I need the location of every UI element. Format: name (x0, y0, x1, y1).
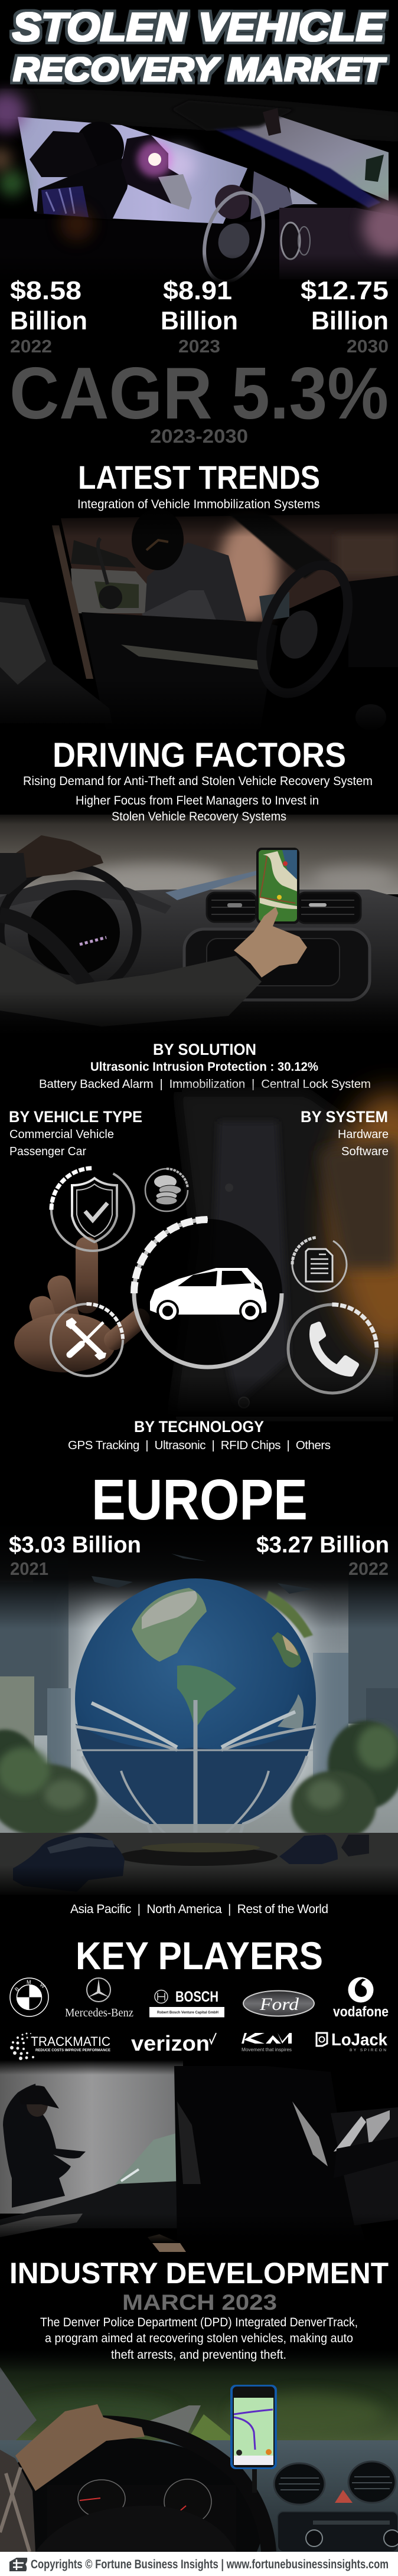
title: STOLEN VEHICLE (12, 5, 386, 50)
by system (301, 1108, 389, 1158)
photo: businessman in suit touching icons (0, 1092, 398, 1417)
market value 2030 (301, 276, 389, 357)
industry development text (40, 2316, 358, 2362)
logo: LoJack: LoJack (331, 2031, 388, 2049)
by solution: Ultrasonic Intrusion Protection : 30.12% (90, 1060, 318, 1074)
driving factors: Rising Demand for Anti-Theft and Stolen Vehicle Recovery System (23, 774, 373, 788)
logo: Vodafone (333, 1977, 389, 2020)
industry development heading: INDUSTRY DEVELOPMENT (9, 2257, 389, 2290)
market value 2022: $8.58 (10, 276, 81, 305)
photo: driver touching phone map on dashboard (0, 806, 398, 1039)
market value 2022 (10, 276, 87, 357)
logo: Ford (243, 1990, 314, 2016)
europe value 2022: 2022 (348, 1558, 389, 1579)
title: RECOVERY MARKET (13, 51, 387, 89)
logo: Kia: Movement that inspires (242, 2047, 292, 2052)
logo: Mercedes-Benz: Mercedes-Benz (65, 2006, 133, 2019)
industry development text: a program aimed at recovering stolen vehicles, making auto (45, 2332, 353, 2345)
logo: Verizon: verizon (131, 2031, 210, 2055)
industry development text: The Denver Police Department (DPD) Integrated DenverTrack, (40, 2316, 358, 2329)
latest trends: Integration of Vehicle Immobilization Systems (77, 498, 320, 511)
europe value 2021: $3.03 Billion (9, 1532, 141, 1558)
logo: Kia (242, 2033, 292, 2052)
market value 2023 (161, 276, 238, 357)
industry development heading: MARCH 2023 (122, 2290, 277, 2315)
market value 2023: $8.91 (163, 276, 232, 305)
by solution: BY SOLUTION (153, 1041, 256, 1058)
by solution (39, 1041, 371, 1091)
icon: phone ring (288, 1305, 377, 1393)
europe heading: EUROPE (92, 1467, 308, 1532)
logo: Mercedes-Benz (65, 1978, 133, 2019)
market value 2030: 2030 (347, 336, 389, 357)
icon: shield ring (36, 1153, 149, 1266)
icon: tools ring (51, 1304, 123, 1376)
logo: Bosch: Robert Bosch Venture Capital GmbH (157, 2011, 218, 2015)
logo: Trackmatic: TRACKMATIC (31, 2034, 110, 2049)
photo: police officer and thief by car (0, 2060, 398, 2252)
europe value 2021 (9, 1532, 141, 1579)
by solution: Battery Backed Alarm | Immobilization | Central Lock System (39, 1077, 371, 1091)
logo: LoJack: BY SPIREON (350, 2048, 386, 2052)
driving factors: DRIVING FACTORS (53, 736, 346, 774)
europe value 2021: 2021 (10, 1558, 48, 1579)
logo: Bosch: BOSCH (175, 1989, 218, 2005)
by system: Software (341, 1145, 389, 1158)
by technology (68, 1418, 331, 1452)
europe value 2022 (256, 1532, 389, 1579)
by technology: BY TECHNOLOGY (134, 1418, 264, 1436)
footer (0, 2552, 398, 2576)
market value 2023: Billion (161, 306, 238, 335)
by vehicle type: Passenger Car (9, 1145, 86, 1158)
logo: Vodafone: vodafone (333, 2004, 389, 2020)
market value 2023: 2023 (178, 336, 220, 357)
by system: BY SYSTEM (301, 1108, 388, 1126)
logo: BMW (10, 1978, 48, 2016)
latest trends: LATEST TRENDS (78, 459, 320, 496)
CAGR: 2023-2030 (150, 426, 248, 447)
logo: Ford: Ford (259, 1995, 299, 2014)
industry development heading (9, 2257, 389, 2315)
logo: Trackmatic (10, 2033, 110, 2060)
europe value 2022: $3.27 Billion (256, 1532, 389, 1558)
logo: Trackmatic: REDUCE COSTS IMPROVE PERFORMANCE (35, 2049, 110, 2052)
logo: BMW: B (14, 1986, 20, 1993)
photo: thief with flashlight looking into car (0, 89, 398, 289)
market value 2022: Billion (10, 306, 87, 335)
icon: document ring (282, 1227, 357, 1302)
logo: BMW: W (39, 1982, 47, 1990)
market value 2030: $12.75 (301, 276, 389, 305)
logo: LoJack (317, 2031, 388, 2052)
industry development text: theft arrests, and preventing theft. (111, 2348, 286, 2362)
market value 2030: Billion (311, 306, 389, 335)
by vehicle type: Commercial Vehicle (9, 1127, 114, 1141)
icon: coins ring (145, 1169, 188, 1211)
by technology: GPS Tracking | Ultrasonic | RFID Chips | Others (68, 1439, 331, 1452)
logo: Bosch (149, 1989, 224, 2018)
icon: car ring (133, 1219, 282, 1368)
driving factors: Stolen Vehicle Recovery Systems (112, 810, 286, 823)
by vehicle type (9, 1108, 142, 1158)
other regions: Asia Pacific | North America | Rest of the World (70, 1902, 328, 1916)
market value 2022: 2022 (10, 336, 52, 357)
key players heading: KEY PLAYERS (76, 1934, 323, 1977)
by vehicle type: BY VEHICLE TYPE (9, 1108, 142, 1126)
title (12, 5, 387, 89)
photo: masked thief at car window (0, 508, 398, 732)
driving factors (23, 736, 373, 823)
by system: Hardware (338, 1127, 389, 1141)
latest trends (77, 459, 320, 511)
logo: BMW: M (27, 1979, 31, 1985)
photo: driver with phone navigation on forest road (0, 2349, 398, 2576)
photo: globe in futuristic city (0, 1517, 398, 1898)
driving factors: Higher Focus from Fleet Managers to Invest in (76, 794, 319, 808)
